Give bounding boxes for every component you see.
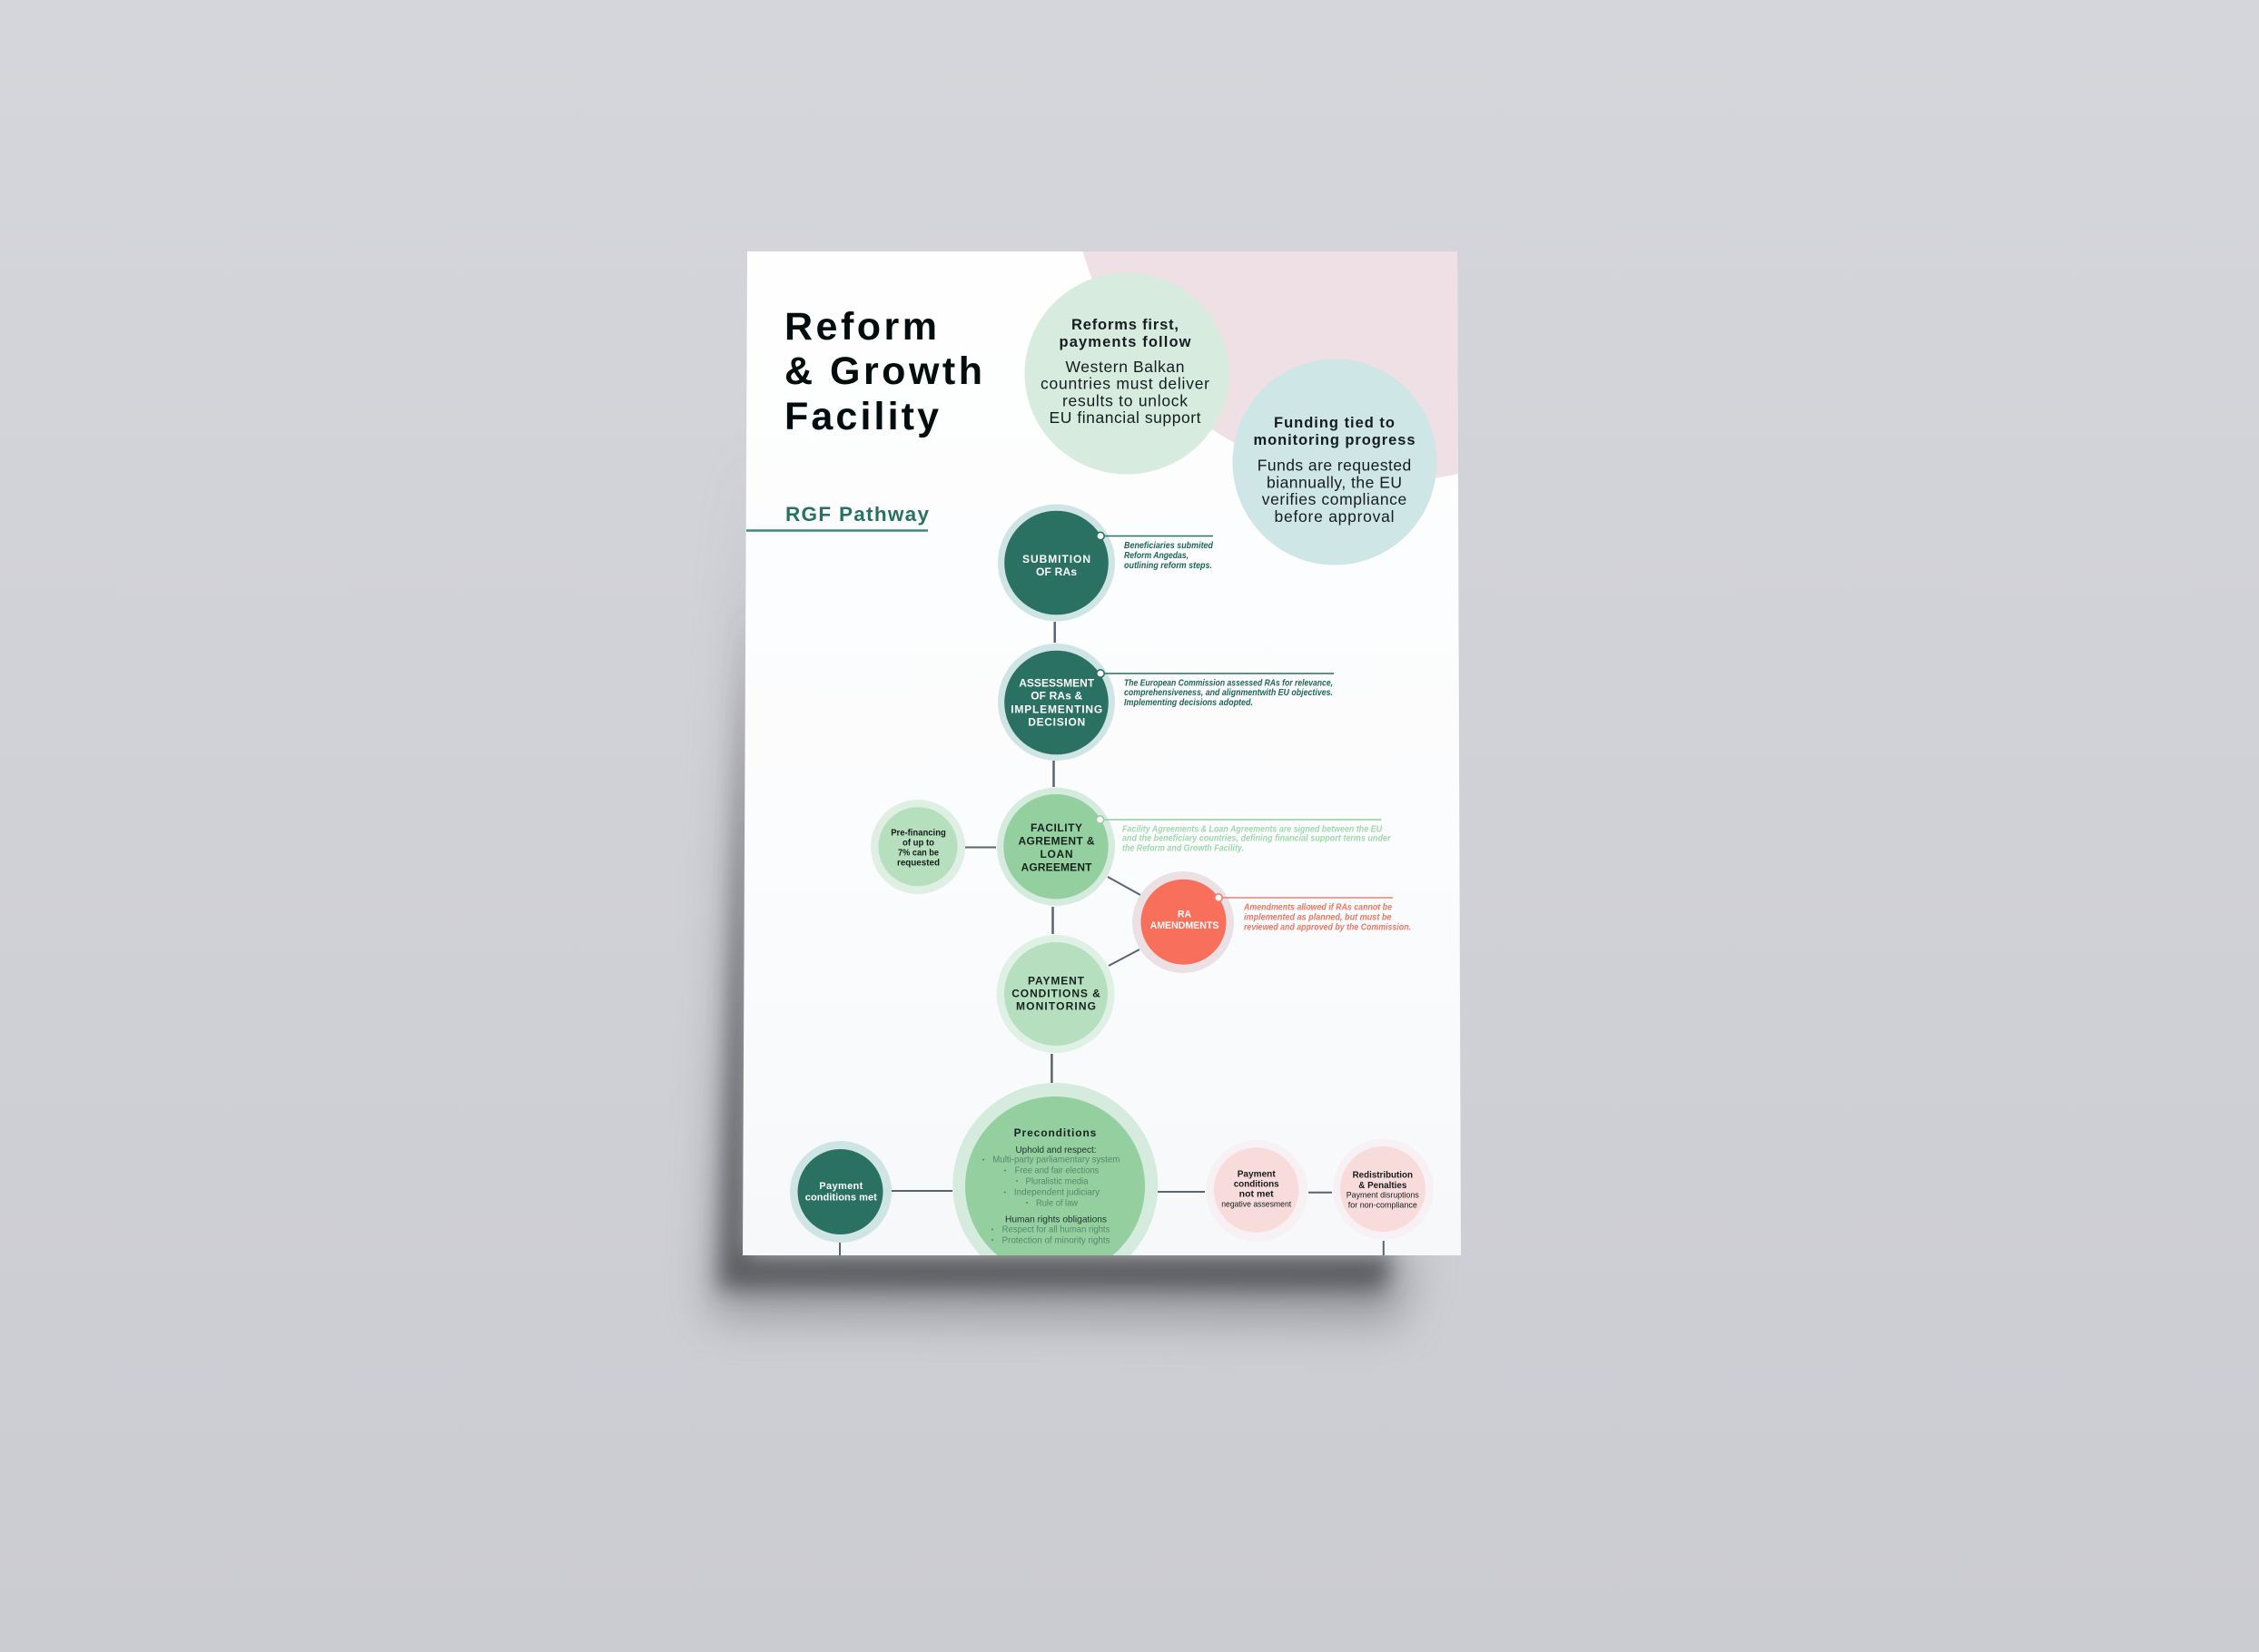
title: Facility xyxy=(784,395,939,438)
node: redistribution and penalties xyxy=(1340,1139,1425,1232)
node: assessment: ASSESSMENT xyxy=(1019,677,1095,690)
node: payment conditions not met: not met xyxy=(1239,1190,1274,1200)
node: payment conditions and monitoring xyxy=(997,935,1115,1053)
node: facility agreement: AGREMENT & xyxy=(1019,835,1095,848)
callout circle: reforms first xyxy=(1024,272,1229,474)
callout circle: funding tied: verifies compliance xyxy=(1262,490,1406,508)
annotation: submission xyxy=(1097,532,1214,571)
node: pre-financing xyxy=(871,800,965,894)
callout circle: funding tied xyxy=(1233,359,1436,565)
node: facility agreement: FACILITY xyxy=(1031,821,1082,834)
annotation: RA amendments: implemented as planned, but must be xyxy=(1244,913,1392,923)
node: redistribution and penalties: Redistribution xyxy=(1353,1171,1413,1181)
annotation: assessment: comprehensiveness, and alignmentwith EU objectives. xyxy=(1124,688,1333,698)
node: facility agreement: AGREEMENT xyxy=(1021,860,1092,873)
callout circle: reforms first: Western Balkan xyxy=(1066,358,1184,376)
annotation: assessment: The European Commission assessed RAs for relevance, xyxy=(1124,678,1333,688)
annotation: submission: outlining reform steps. xyxy=(1124,561,1212,571)
node: preconditions: Protection of minority rights xyxy=(1002,1234,1110,1245)
node: RA amendments: AMENDMENTS xyxy=(1150,920,1218,931)
node: preconditions: Free and fair elections xyxy=(1015,1165,1099,1176)
node: preconditions: Uphold and respect: xyxy=(1015,1145,1097,1155)
annotation: RA amendments xyxy=(1215,894,1411,933)
node: preconditions xyxy=(952,1083,1159,1255)
node: preconditions: Respect for all human rights xyxy=(1002,1224,1110,1235)
node: assessment: IMPLEMENTING xyxy=(1011,703,1102,715)
callout circle: reforms first: Reforms first, xyxy=(1071,317,1179,333)
node: payment conditions not met: Payment xyxy=(1238,1169,1276,1179)
annotation: facility agreement xyxy=(1096,816,1391,854)
node: pre-financing: requested xyxy=(897,859,940,869)
title: & Growth xyxy=(784,349,982,393)
node: RA amendments: RA xyxy=(1178,910,1191,920)
annotation: facility agreement: Facility Agreements & Loan Agreements are signed between the EU xyxy=(1122,824,1383,834)
node: payment conditions and monitoring: CONDITIONS & xyxy=(1011,988,1100,1000)
callout circle: reforms first: EU financial support xyxy=(1050,408,1201,427)
node: preconditions: Rule of law xyxy=(1036,1197,1078,1208)
node: submition of RAs xyxy=(998,505,1115,621)
poster sheet xyxy=(743,251,1461,1255)
annotation: submission: Reform Angedas, xyxy=(1124,551,1189,561)
node: payment conditions not met: negative assesment xyxy=(1221,1199,1292,1209)
callout circle: funding tied: before approval xyxy=(1275,507,1395,526)
node: facility agreement xyxy=(997,788,1115,906)
node: payment conditions met: conditions met xyxy=(805,1193,877,1204)
title xyxy=(784,305,982,438)
node: preconditions: Preconditions xyxy=(1014,1126,1097,1139)
node: assessment: OF RAs & xyxy=(1031,690,1083,703)
node: payment conditions met xyxy=(790,1141,892,1243)
node: facility agreement: LOAN xyxy=(1041,848,1073,860)
node: preconditions: Pluralistic media xyxy=(1026,1175,1089,1186)
node: submition of RAs: OF RAs xyxy=(1036,565,1077,578)
annotation: facility agreement: the Reform and Growth Facility. xyxy=(1122,844,1244,854)
title: Reform xyxy=(784,305,937,349)
node: payment conditions not met xyxy=(1213,1140,1298,1233)
node: preconditions: Independent judiciary xyxy=(1014,1187,1100,1198)
paper drop shadow xyxy=(710,436,1416,1323)
annotation: submission: Beneficiaries submited xyxy=(1124,541,1214,551)
node: redistribution and penalties: Payment disruptions xyxy=(1347,1191,1419,1201)
node: preconditions: Human rights obligations xyxy=(1005,1214,1107,1225)
node: payment conditions and monitoring: PAYMENT xyxy=(1028,974,1085,987)
callout circle: reforms first: payments follow xyxy=(1059,334,1191,350)
node: redistribution and penalties: & Penalties xyxy=(1358,1181,1407,1191)
node: payment conditions and monitoring: MONITORING xyxy=(1016,1000,1096,1013)
node: RA amendments xyxy=(1132,871,1234,973)
node: payment conditions met: Payment xyxy=(819,1181,863,1192)
callout circle: reforms first: countries must deliver xyxy=(1041,374,1209,392)
annotation: facility agreement: and the beneficiary countries, defining financial support terms under xyxy=(1122,834,1391,844)
pathway connector lines xyxy=(840,622,1384,1255)
node: payment conditions not met: conditions xyxy=(1234,1180,1279,1190)
annotation: RA amendments: Amendments allowed if RAs cannot be xyxy=(1243,903,1392,913)
node: preconditions: Multi-party parliamentary system xyxy=(992,1155,1120,1165)
annotation: assessment: Implementing decisions adopted. xyxy=(1124,698,1253,708)
node: pre-financing: of up to xyxy=(903,838,934,848)
section heading: RGF Pathway: RGF Pathway xyxy=(785,503,929,526)
callout circle: reforms first: results to unlock xyxy=(1062,392,1188,410)
annotation: assessment xyxy=(1097,670,1334,708)
callout circle: funding tied: Funding tied to xyxy=(1274,415,1395,431)
node: pre-financing: Pre-financing xyxy=(891,828,946,838)
callout circle: funding tied: monitoring progress xyxy=(1253,432,1415,448)
node: assessment: DECISION xyxy=(1028,715,1085,728)
decorative pink circle xyxy=(1082,251,1458,478)
callout circle: funding tied: biannually, the EU xyxy=(1267,474,1402,492)
node: assessment xyxy=(998,644,1115,761)
callout circle: funding tied: Funds are requested xyxy=(1258,456,1411,474)
node: pre-financing: 7% can be xyxy=(898,848,939,858)
node: submition of RAs: SUBMITION xyxy=(1022,553,1090,565)
node: redistribution and penalties: for non-compliance xyxy=(1348,1200,1417,1210)
annotation: RA amendments: reviewed and approved by the Commission. xyxy=(1244,923,1411,933)
